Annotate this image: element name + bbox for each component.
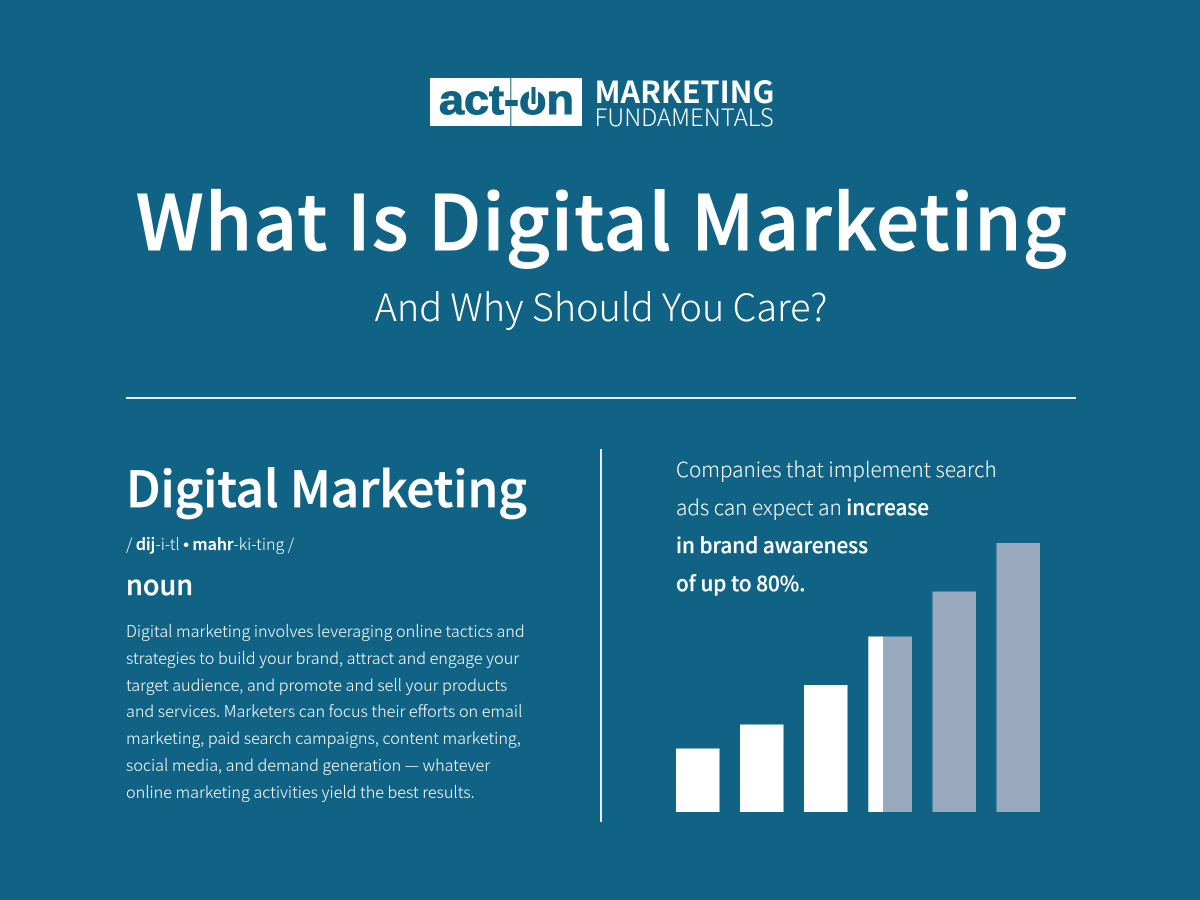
definition text: strategies to build your brand, attract and engage your bbox=[126, 645, 519, 669]
horizontal divider bbox=[126, 397, 1076, 399]
subtitle: And Why Should You Care? bbox=[375, 277, 827, 332]
definition text bbox=[126, 618, 525, 803]
stat text bbox=[676, 453, 997, 597]
panel: definition bbox=[126, 451, 527, 803]
vertical divider bbox=[600, 449, 602, 822]
stat text: Companies that implement search bbox=[676, 453, 997, 483]
part of speech: noun bbox=[126, 564, 193, 603]
logo header bbox=[430, 68, 774, 133]
logo text: marketing: MARKETING bbox=[594, 68, 774, 112]
logo text: fundamentals: FUNDAMENTALS bbox=[594, 98, 774, 133]
definition text: Digital marketing involves leveraging online tactics and bbox=[126, 618, 525, 642]
heading: digital marketing: Digital Marketing bbox=[126, 451, 527, 522]
definition text: social media, and demand generation — whatever bbox=[126, 752, 490, 776]
definition text: online marketing activities yield the best results. bbox=[126, 779, 475, 803]
bar chart bbox=[676, 543, 1040, 812]
stat text: of up to 80%. bbox=[676, 567, 805, 597]
pronunciation: / dij-i-tl • mahr-ki-ting / bbox=[126, 531, 294, 555]
title: What Is Digital Marketing bbox=[136, 162, 1068, 272]
stat text: ads can expect an increase bbox=[676, 491, 929, 521]
definition text: target audience, and promote and sell your products bbox=[126, 672, 507, 696]
definition text: and services. Marketers can focus their efforts on email bbox=[126, 698, 522, 722]
definition text: marketing, paid search campaigns, content marketing, bbox=[126, 725, 521, 749]
stat text: in brand awareness bbox=[676, 529, 868, 559]
